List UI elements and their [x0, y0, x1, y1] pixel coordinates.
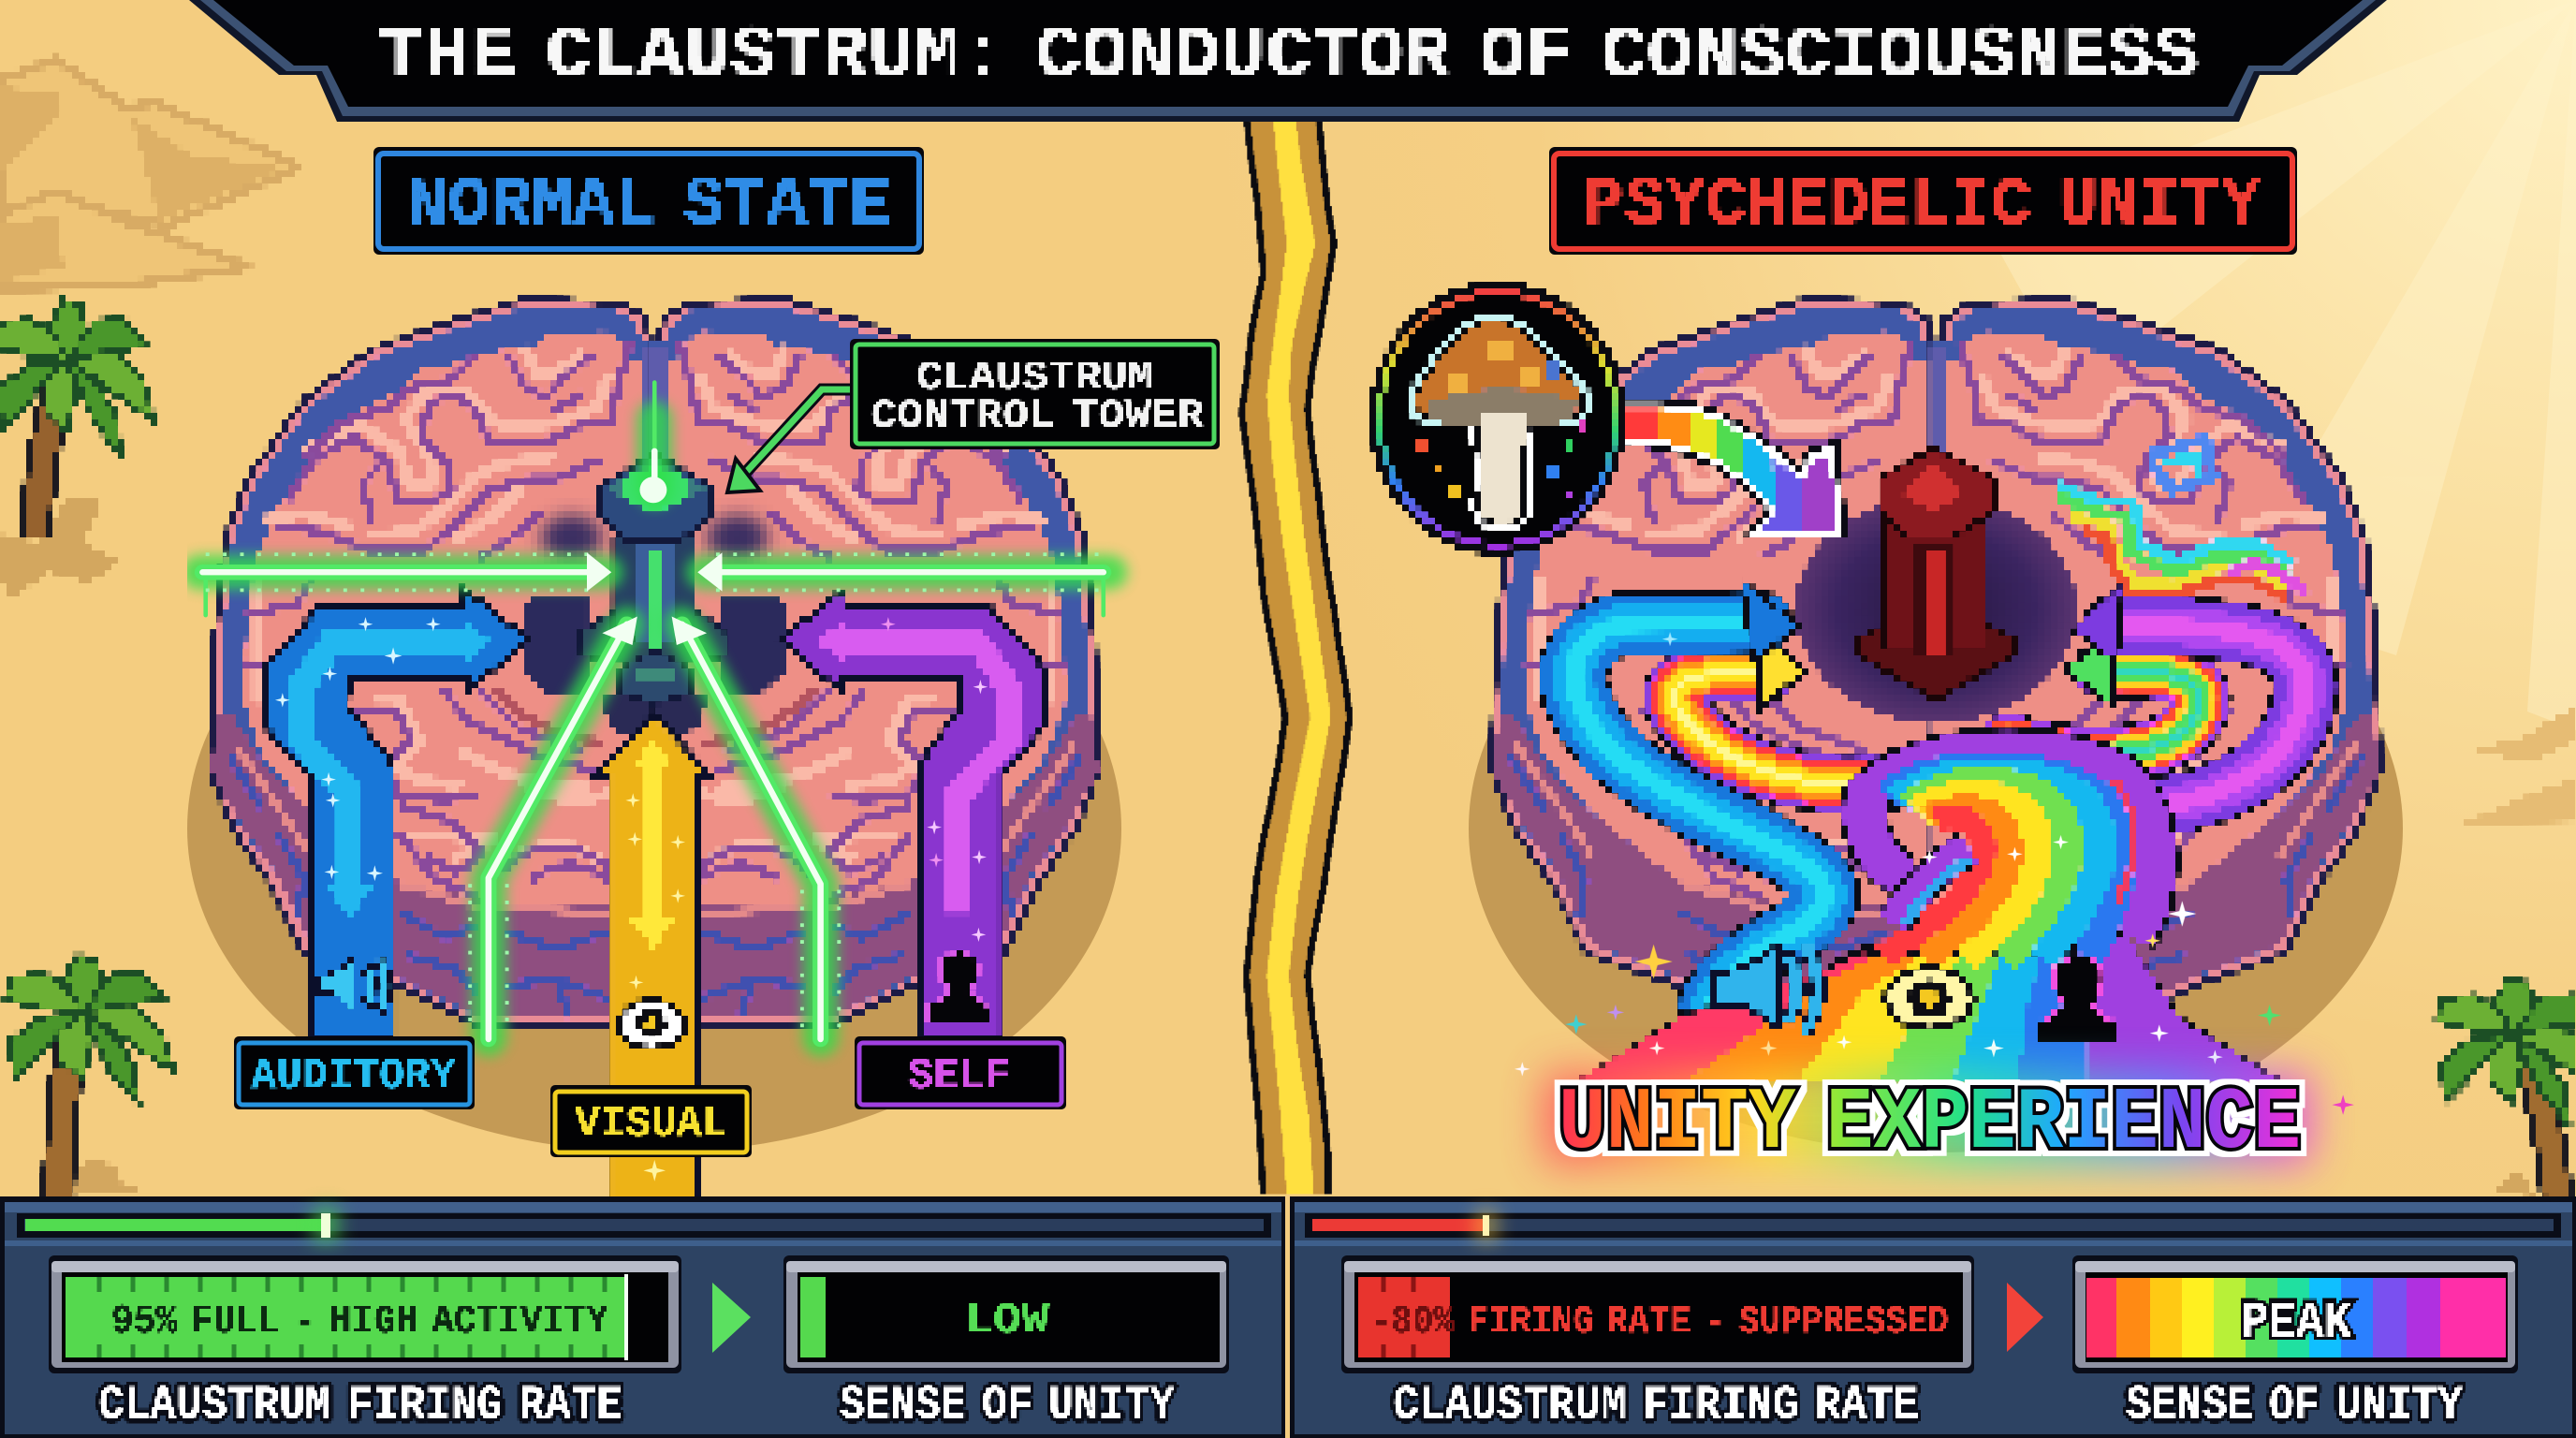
arrow: mushroom to tower	[1624, 404, 1843, 535]
icon: person	[929, 951, 989, 1022]
panel: normal state	[187, 147, 1220, 1200]
normal brain and pathways	[211, 299, 1099, 1200]
sparkles around river	[1515, 632, 2354, 1115]
arrow: rainbow stream right	[2008, 632, 2200, 755]
icon: mushroom badge	[1374, 286, 1621, 550]
callout arrow	[727, 389, 852, 492]
heading: psychedelic unity: PSYCHEDELIC UNITY	[1584, 167, 2262, 245]
dashboard: normal state	[0, 1196, 1285, 1438]
callout: claustrum control tower: CLAUSTRUM	[916, 355, 1154, 402]
icon: eye	[1886, 969, 1972, 1029]
arrow: purple stream	[2072, 580, 2305, 806]
top progress bar	[17, 1208, 1271, 1241]
label: visual: VISUAL	[575, 1100, 727, 1150]
label: self	[855, 1036, 1066, 1109]
palm tree upper left	[0, 300, 154, 599]
pixel scenery: dunes and palms	[0, 60, 2576, 1198]
firing rate gauge	[1341, 1255, 1974, 1373]
title banner	[189, 0, 2387, 122]
dunes top left	[0, 60, 300, 288]
arrow: self pathway	[781, 588, 1045, 1036]
brain shadow	[1469, 505, 2403, 1152]
unity gauge peak: PEAK	[2241, 1295, 2352, 1352]
arrow: blue stream	[1573, 580, 1824, 1004]
arrow: rainbow stream left	[1675, 632, 1916, 784]
panel: psychedelic unity	[1374, 147, 2403, 1174]
suppressed void	[1794, 496, 2077, 723]
brain: psychedelic	[1492, 299, 2380, 1027]
rainbow bar	[2086, 1278, 2506, 1357]
heading: normal state: NORMAL STATE	[406, 167, 891, 245]
palm tree lower left	[6, 955, 174, 1198]
label: auditory: AUDITORY	[251, 1052, 457, 1102]
dark red tower	[1857, 448, 2014, 700]
glowing claustrum connections	[199, 382, 1109, 1039]
sun rays	[1984, 0, 2576, 730]
cortical rainbow patch	[2061, 439, 2304, 597]
title text: THE CLAUSTRUM: CONDUCTOR OF CONSCIOUSNESS	[378, 14, 2200, 99]
unity experience label: UNITY EXPERIENCE	[1559, 1075, 2301, 1174]
arrow: auditory pathway	[264, 588, 529, 1036]
icon: speaker	[1714, 946, 1818, 1029]
central divider	[1242, 115, 1350, 1197]
icon: person	[2038, 956, 2116, 1042]
heading: psychedelic unity	[1549, 147, 2297, 255]
icon: speaker	[317, 957, 387, 1012]
caption: claustrum firing rate: CLAUSTRUM FIRING RATE	[98, 1378, 622, 1433]
caption: sense of unity: SENSE OF UNITY	[2126, 1378, 2464, 1433]
firing rate gauge: 95% FULL - HIGH ACTIVITY	[111, 1299, 609, 1345]
unity gauge peak	[2072, 1255, 2518, 1373]
brain shadow	[187, 505, 1121, 1152]
brain: normal	[211, 299, 1099, 1027]
caption: claustrum firing rate: CLAUSTRUM FIRING RATE	[1393, 1378, 1919, 1433]
callout: claustrum control tower	[727, 339, 1220, 492]
caption: sense of unity: SENSE OF UNITY	[840, 1378, 1176, 1433]
label: visual	[550, 1085, 752, 1157]
callout: claustrum control tower: CONTROL TOWER	[871, 393, 1205, 440]
dashboard: psychedelic state	[1290, 1196, 2576, 1438]
arrow: green	[712, 1283, 751, 1353]
label: auditory	[234, 1036, 475, 1109]
arrow: visual pathway	[593, 713, 713, 1200]
icon: eye	[618, 1001, 684, 1049]
claustrum control tower	[580, 454, 728, 704]
label: self: SELF	[908, 1052, 1010, 1102]
firing rate gauge	[49, 1255, 681, 1373]
arrow: red	[2007, 1283, 2043, 1352]
dunes far right	[2462, 707, 2576, 824]
psychedelic brain and rainbow flows	[1374, 286, 2380, 1084]
heading: normal state	[373, 147, 924, 255]
rainbow river	[1572, 750, 2288, 1084]
firing rate gauge: -80% FIRING RATE - SUPPRESSED	[1370, 1299, 1949, 1344]
unity gauge low: LOW	[965, 1297, 1049, 1345]
top progress bar	[1305, 1210, 2561, 1241]
sparkles on pathways	[275, 617, 988, 1181]
palm tree lower right	[2437, 976, 2576, 1198]
unity gauge low	[783, 1255, 1229, 1373]
